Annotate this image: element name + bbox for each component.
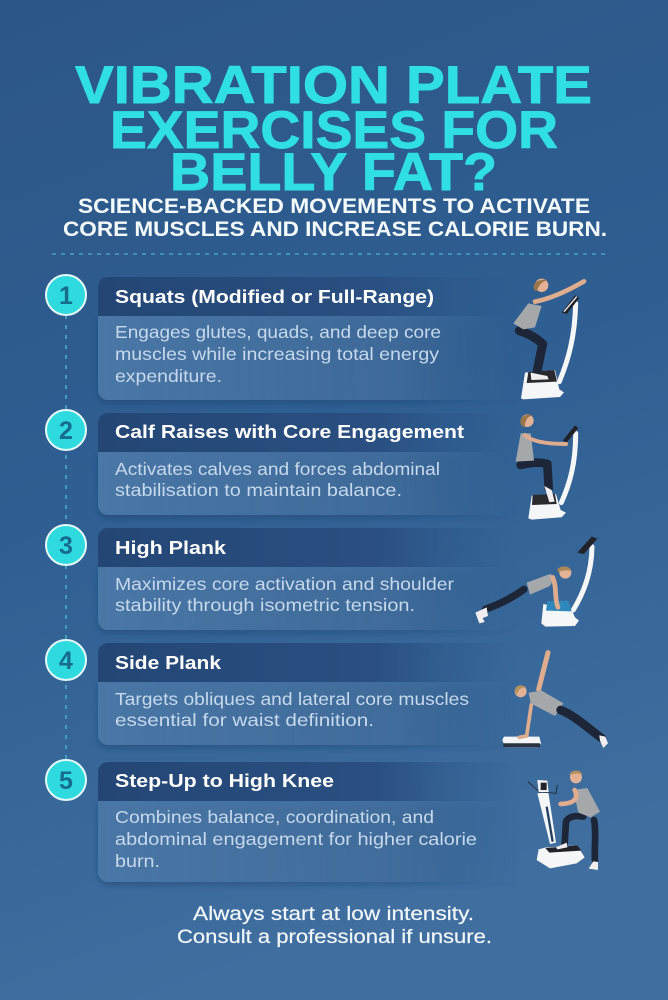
footer note: Consult a professional if unsure.: [177, 926, 492, 948]
step 1 card body: [98, 316, 520, 400]
step 1 number badge: 1: [59, 282, 73, 310]
step 2 number badge: [46, 410, 86, 450]
subtitle: SCIENCE-BACKED MOVEMENTS TO ACTIVATE: [78, 195, 590, 218]
step 1 description: Engages glutes, quads, and deep core: [115, 322, 441, 342]
title: EXERCISES FOR: [110, 101, 558, 160]
step 5 card header: [98, 762, 520, 801]
step 5 card body: [98, 801, 520, 882]
step 3 heading: High Plank: [115, 537, 227, 558]
step 2 description: [115, 459, 440, 500]
step 3 card header: [98, 528, 520, 567]
step 1 description: muscles while increasing total energy: [115, 344, 439, 364]
step 3 description: [115, 574, 454, 615]
step 5 number badge: 5: [59, 767, 73, 795]
subtitle: [63, 195, 607, 241]
step 3 card body: [98, 567, 520, 630]
step 1 heading: Squats (Modified or Full-Range): [115, 286, 434, 307]
step 3 number badge: [46, 525, 86, 565]
step 4 card body: [98, 682, 520, 745]
title: [75, 56, 592, 202]
step 4 number badge: 4: [59, 647, 73, 675]
step 4 description: essential for waist definition.: [115, 710, 374, 730]
step 1 description: expenditure.: [115, 366, 222, 386]
icon: woman squatting on vibration plate: [513, 279, 584, 399]
icon: woman doing calf raise on vibration plate: [516, 414, 578, 520]
step 5 description: burn.: [115, 851, 160, 871]
step 1 panel: [46, 275, 520, 400]
step 2 heading: Calf Raises with Core Engagement: [115, 421, 464, 442]
step 5 heading: Step-Up to High Knee: [115, 770, 334, 791]
step 2 description: Activates calves and forces abdominal: [115, 459, 440, 479]
step 3 number badge: 3: [59, 532, 73, 560]
step 2 card body: [98, 452, 520, 515]
step 2 panel: [46, 410, 520, 515]
step 5 description: [115, 807, 477, 871]
title: BELLY FAT?: [170, 143, 497, 202]
step 5 number badge: [46, 760, 86, 800]
step 3 description: stability through isometric tension.: [115, 595, 415, 615]
title: VIBRATION PLATE: [75, 56, 592, 115]
subtitle: CORE MUSCLES AND INCREASE CALORIE BURN.: [63, 218, 607, 241]
icon: woman in side plank on vibration plate: [502, 653, 608, 748]
step 2 description: stabilisation to maintain balance.: [115, 480, 402, 500]
step 4 card header: [98, 643, 520, 682]
step 5 description: Combines balance, coordination, and: [115, 807, 434, 827]
footer note: Always start at low intensity.: [193, 903, 474, 925]
step 5 panel: [46, 760, 520, 882]
step 3 panel: [46, 525, 520, 630]
step 1 number badge: [46, 275, 86, 315]
step 4 number badge: [46, 640, 86, 680]
step 4 description: [115, 689, 469, 730]
icon: woman stepping up on vibration plate: [528, 770, 600, 870]
icon: woman in high plank on vibration plate: [475, 537, 597, 627]
step 4 panel: [46, 640, 520, 745]
step 4 description: Targets obliques and lateral core muscles: [115, 689, 469, 709]
step 2 number badge: 2: [59, 417, 73, 445]
step 5 description: abdominal engagement for higher calorie: [115, 829, 477, 849]
footer note: [177, 903, 492, 948]
step 4 heading: Side Plank: [115, 652, 222, 673]
step 1 description: [115, 322, 441, 386]
step 1 card header: [98, 277, 520, 316]
step 3 description: Maximizes core activation and shoulder: [115, 574, 454, 594]
step 2 card header: [98, 413, 520, 452]
